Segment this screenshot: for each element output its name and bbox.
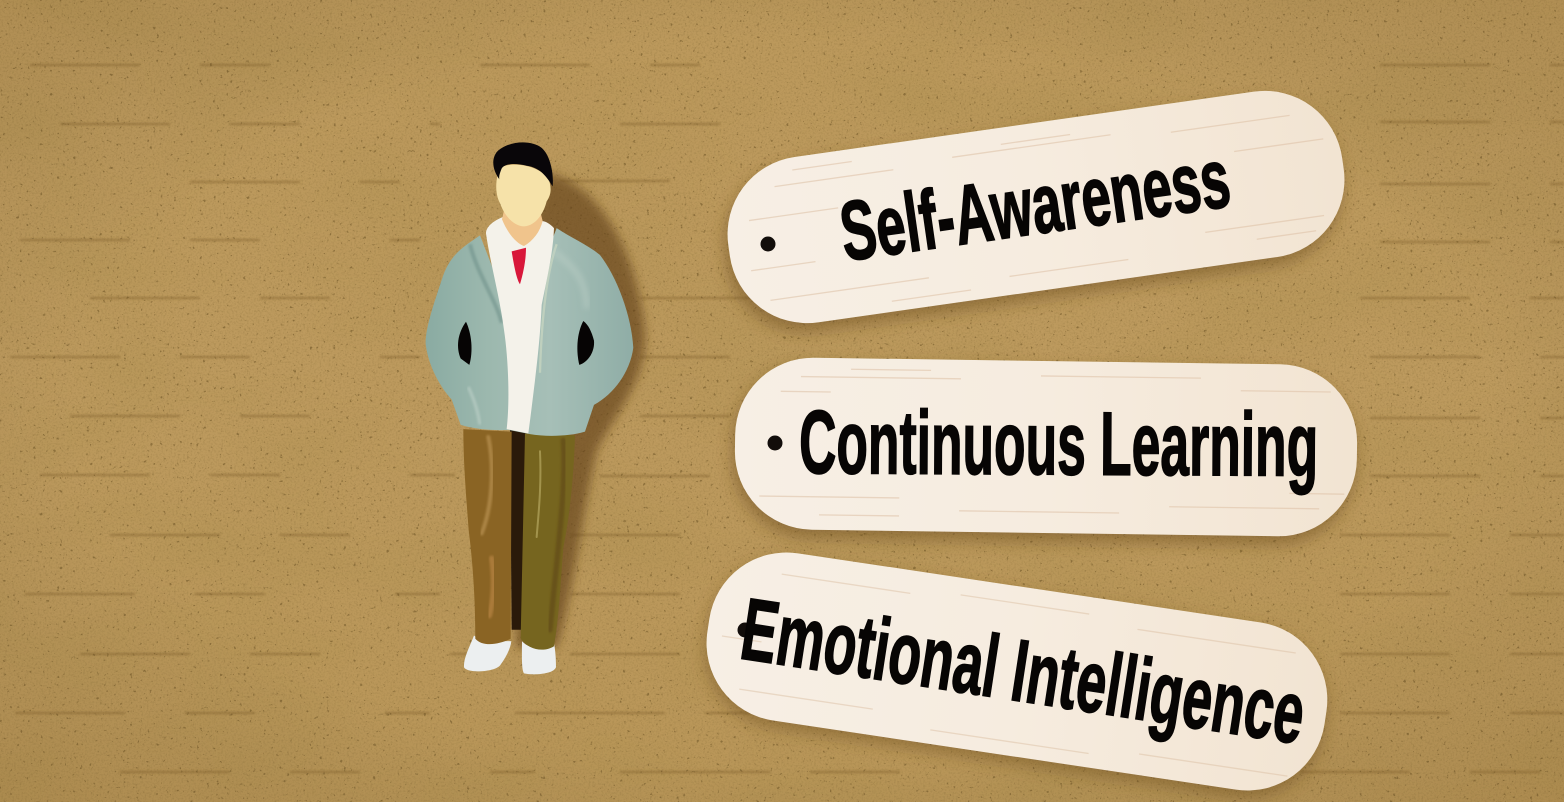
head [496,165,551,226]
bullet [738,622,752,638]
jacket [426,228,633,436]
stick: Emotional Intelligence [695,542,1338,802]
hair [493,142,553,186]
stick body [734,357,1358,537]
stick body [717,81,1355,333]
sweater [486,217,554,433]
figure shadow [517,173,645,648]
trouser highlights [482,437,564,630]
bullet [768,436,782,450]
trouser gap [510,430,527,630]
stick: Continuous Learning [732,357,1358,545]
tie [512,248,526,284]
arm openings [458,321,594,365]
label: Self-Awareness [834,131,1236,279]
stick: Self-Awareness [714,81,1355,342]
neck [502,210,543,246]
stick body [696,542,1338,801]
figure: miniature man in grey-green jacket [426,142,645,674]
shoes [464,636,556,674]
bullet [760,236,776,252]
jacket folds [468,244,587,425]
trousers [463,429,512,644]
